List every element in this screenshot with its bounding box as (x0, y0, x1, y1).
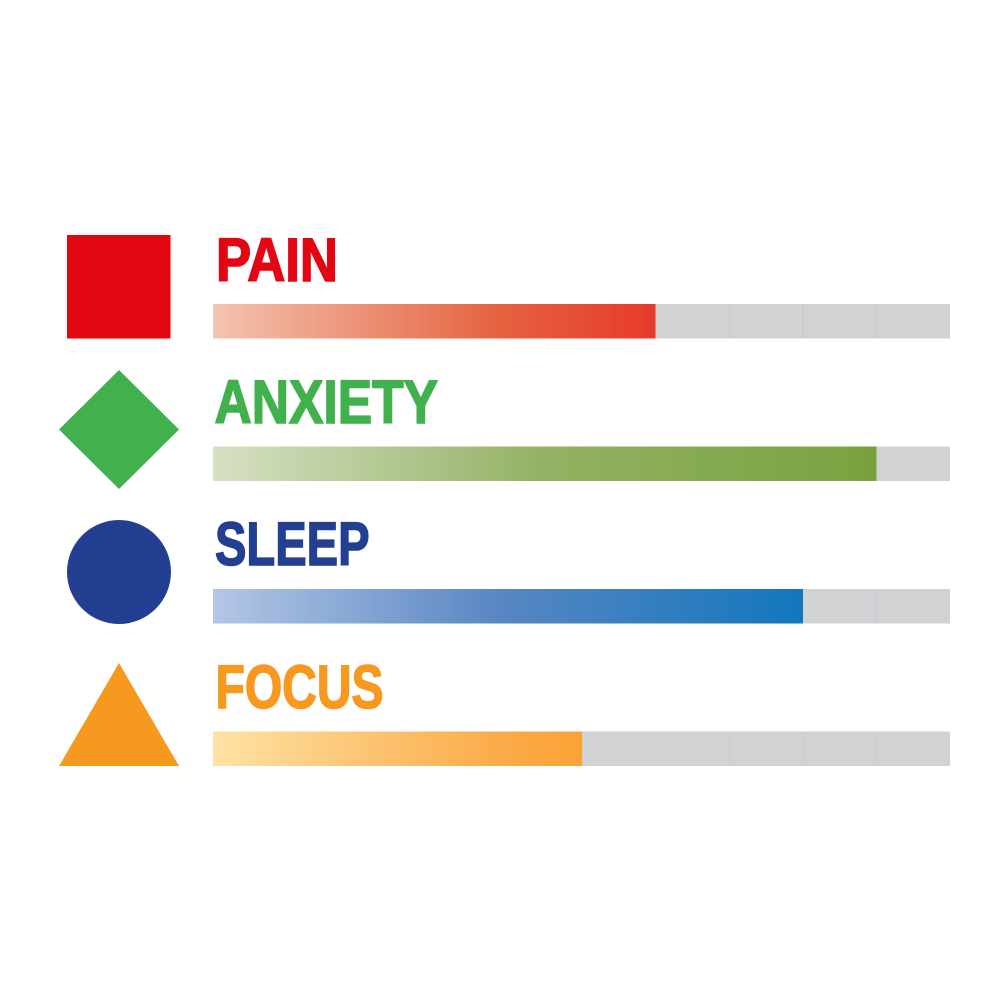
bar: focus (213, 732, 950, 766)
row: pain (67, 226, 950, 338)
icon: green diamond (59, 370, 179, 489)
row: anxiety (59, 368, 950, 489)
row: sleep (67, 510, 950, 624)
bar: sleep (213, 589, 950, 624)
heading: sleep: SLEEP (215, 510, 370, 579)
icon: red square (67, 235, 170, 338)
row: focus (59, 653, 950, 766)
bar: pain (213, 304, 950, 338)
heading: pain: PAIN (216, 226, 338, 295)
icon: blue circle (67, 520, 171, 624)
heading: focus: FOCUS (216, 653, 384, 722)
bar: anxiety (213, 446, 950, 481)
heading: anxiety: ANXIETY (214, 368, 438, 437)
icon: orange triangle (59, 663, 179, 766)
